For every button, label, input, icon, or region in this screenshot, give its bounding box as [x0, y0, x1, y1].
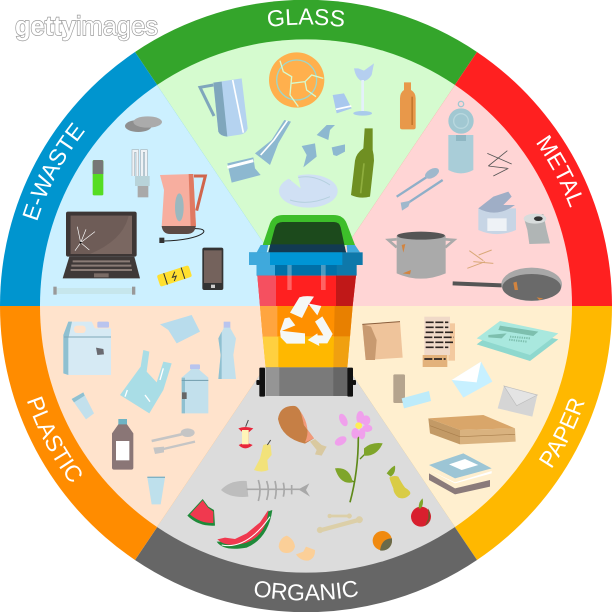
broken laptop [63, 212, 140, 278]
broken orange plate [269, 52, 324, 108]
broken white plate [279, 173, 338, 208]
rotten orange [373, 531, 392, 551]
coins [125, 116, 162, 132]
inner pale sectors [40, 39, 572, 573]
recycling symbol [280, 296, 333, 346]
label: paper: PAPER [539, 398, 585, 468]
pear [387, 466, 410, 498]
yellow battery [157, 265, 192, 287]
bin yellow section [263, 337, 350, 367]
grey envelope [498, 386, 537, 417]
watermark: gettyimages [15, 11, 158, 41]
books [429, 453, 492, 494]
glass jug [200, 78, 248, 137]
plastic jug [182, 364, 208, 413]
opened tin can [448, 101, 474, 173]
panel: organic items [187, 406, 431, 561]
plastic canister [63, 322, 111, 375]
red apple [411, 498, 431, 527]
plastic cup [72, 392, 94, 419]
frying pan [453, 268, 562, 301]
spoon [397, 166, 441, 197]
brown bottle [112, 419, 133, 470]
bin handles [287, 265, 326, 290]
fork [401, 180, 443, 211]
bin orange section [260, 306, 353, 337]
bin grey base [266, 367, 347, 396]
bones [317, 514, 363, 533]
bin blue section [257, 265, 357, 276]
eggshells [279, 536, 315, 561]
paper bag [362, 322, 403, 360]
tube light [53, 287, 135, 295]
panel: e-waste items [53, 116, 223, 295]
pins [467, 250, 493, 268]
battery [93, 160, 103, 195]
wine glass [353, 63, 374, 116]
energy-saving bulb [133, 151, 150, 197]
plastic bag [120, 350, 172, 413]
cardboard tube [393, 374, 405, 403]
pear core [254, 440, 272, 472]
label: glass: GLASS [268, 8, 344, 26]
panel: plastic items [63, 315, 236, 504]
rusty pot [388, 232, 454, 279]
panel: metal items [388, 101, 562, 301]
label: e-waste: E-WASTE [22, 122, 85, 220]
newspapers [477, 321, 558, 361]
chicken leg [278, 406, 327, 456]
glass shard [333, 93, 352, 113]
cardboard box [428, 415, 516, 444]
kettle [159, 174, 205, 243]
smartphone [202, 248, 223, 290]
broken bottle base [227, 157, 261, 183]
opened tuna can [478, 192, 516, 234]
nails [487, 151, 512, 176]
panel: paper items [362, 317, 558, 494]
label: metal: METAL [536, 134, 582, 208]
apple core [238, 420, 253, 448]
panel: glass items [200, 52, 416, 208]
crushed can [524, 214, 550, 244]
paper documents [423, 317, 455, 367]
fish bone [221, 480, 310, 501]
label: organic: ORGANIC [254, 580, 358, 600]
recycling bin [249, 215, 363, 397]
broken bottle neck [255, 120, 291, 165]
orange bottle [400, 82, 416, 129]
clear cup [147, 477, 165, 504]
green bottle [351, 128, 374, 198]
plastic fork [153, 442, 195, 454]
label: plastic: PLASTIC [27, 396, 82, 482]
bin lid [257, 215, 360, 252]
bin rim band [249, 252, 363, 265]
crumpled plastic [160, 315, 200, 343]
white envelope [452, 362, 492, 398]
bin red section [257, 276, 356, 306]
glass pieces [302, 125, 345, 167]
watermelon rind [217, 510, 272, 549]
bin wheels [256, 368, 356, 397]
watermelon slice [187, 499, 215, 526]
plastic spoon [152, 428, 195, 441]
blue paper roll [402, 391, 431, 408]
flower [333, 411, 383, 502]
plastic water bottle [218, 322, 236, 379]
